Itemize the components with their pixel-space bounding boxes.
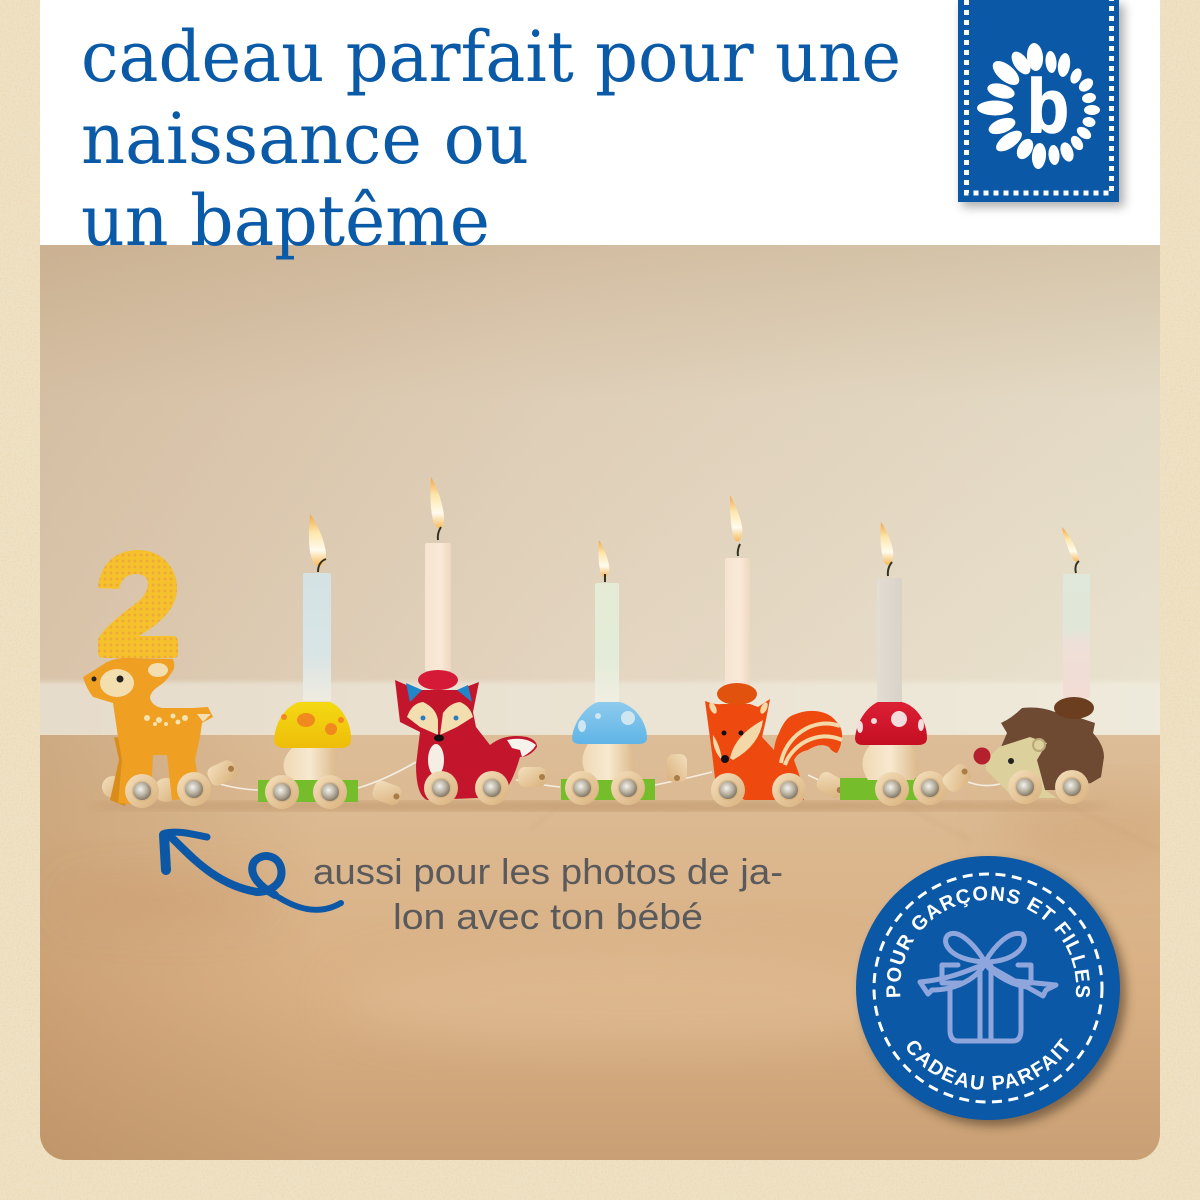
logo tag xyxy=(958,0,1124,207)
deer face xyxy=(100,669,134,697)
wall shading xyxy=(40,245,1160,444)
candle xyxy=(425,543,451,671)
bead xyxy=(205,758,239,788)
wall xyxy=(40,245,1160,695)
yellow cap xyxy=(274,702,351,748)
caption: aussi pour les photos de ja- xyxy=(313,851,783,892)
flower logo xyxy=(977,42,1100,170)
stem xyxy=(582,744,635,780)
wheels xyxy=(1008,770,1042,804)
stitched ring xyxy=(874,874,1102,1102)
deer ear xyxy=(148,663,168,677)
cap spots xyxy=(578,711,635,732)
deer eye and nose xyxy=(92,676,124,682)
title: cadeau parfait pour une xyxy=(81,16,901,98)
floor plank lines xyxy=(530,806,1160,850)
floor tones xyxy=(395,796,1160,1038)
floor side shading xyxy=(40,735,214,1160)
deer wheels xyxy=(125,774,159,808)
toy train xyxy=(83,477,1104,809)
hedgehog spines xyxy=(1001,708,1104,790)
deer tail mark xyxy=(197,714,211,722)
wooden floor xyxy=(40,735,1160,1160)
deer with number two xyxy=(83,550,213,808)
blue cap xyxy=(572,702,647,744)
white header panel xyxy=(40,0,1160,246)
wick xyxy=(1075,561,1079,573)
flame xyxy=(598,540,609,577)
badge shadow xyxy=(862,862,1126,1126)
wheels xyxy=(711,773,745,807)
fox body xyxy=(395,680,537,800)
hedgehog wagon xyxy=(974,527,1104,804)
bead xyxy=(370,779,404,807)
hedgehog eye xyxy=(1008,758,1014,764)
flame xyxy=(880,522,893,565)
cords xyxy=(212,762,1010,790)
title xyxy=(81,16,901,262)
candle xyxy=(877,578,902,704)
hedgehog ear xyxy=(1033,739,1045,751)
squirrel eyes and nose xyxy=(721,730,744,763)
caption: lon avec ton bébé xyxy=(393,896,703,937)
flame xyxy=(730,495,742,541)
blue mushroom wagon xyxy=(561,540,655,805)
badge xyxy=(856,856,1132,1132)
red mushroom wagon xyxy=(840,522,947,806)
candle xyxy=(725,558,750,686)
tail stripes xyxy=(781,724,842,765)
candle xyxy=(303,573,331,701)
number 2 xyxy=(98,550,178,658)
flame xyxy=(309,514,326,566)
fox belly xyxy=(428,744,444,776)
deer spots xyxy=(144,714,188,726)
tail tip xyxy=(507,739,536,757)
wheels xyxy=(565,771,599,805)
toy shadows xyxy=(90,801,1110,811)
cheek xyxy=(713,735,722,760)
deer side edge xyxy=(110,737,135,806)
badge top text: POUR GARÇONS ET FILLES xyxy=(886,886,1090,998)
wick xyxy=(604,574,606,582)
green base xyxy=(840,778,922,800)
squirrel body and tail xyxy=(705,699,842,800)
cap spots xyxy=(281,713,344,735)
logo letter: b xyxy=(1027,64,1069,149)
wick xyxy=(438,527,441,540)
deer back wheels xyxy=(102,776,124,798)
photo panel xyxy=(30,245,1200,1160)
wheels xyxy=(265,775,299,809)
cap spots xyxy=(857,711,924,733)
stem xyxy=(862,745,918,780)
fox eyes and nose xyxy=(420,716,458,742)
candle xyxy=(1063,574,1090,698)
deer back wheel rear xyxy=(154,778,178,802)
red fox wagon xyxy=(395,477,537,805)
bead xyxy=(940,761,974,795)
title: naissance ou xyxy=(81,98,529,180)
wick xyxy=(738,544,740,556)
orange squirrel wagon xyxy=(705,495,842,807)
wheels xyxy=(424,771,458,805)
fox ears xyxy=(406,683,472,702)
flame xyxy=(1062,527,1079,562)
tag shadow xyxy=(962,4,1124,207)
baseboard xyxy=(30,682,1170,736)
red cap xyxy=(855,702,927,745)
bead holder xyxy=(1054,697,1094,719)
tag body xyxy=(958,0,1119,202)
bead holder xyxy=(418,670,458,690)
wick xyxy=(318,559,326,572)
hedgehog face xyxy=(986,737,1057,798)
yellow mushroom wagon xyxy=(258,514,358,809)
stem xyxy=(283,748,337,780)
bead xyxy=(667,754,687,782)
green base xyxy=(258,780,358,802)
muzzle xyxy=(730,720,763,760)
badge disc xyxy=(856,856,1120,1120)
wick xyxy=(888,562,892,576)
caption xyxy=(313,851,783,937)
deer body xyxy=(83,658,213,805)
gift icon xyxy=(920,933,1056,1041)
arrow xyxy=(164,832,341,910)
title: un baptême xyxy=(81,180,490,262)
hedgehog nose xyxy=(974,748,990,764)
ear marks xyxy=(708,701,769,715)
wheels xyxy=(875,772,909,806)
badge bottom text: CADEAU PARFAIT xyxy=(907,1038,1069,1090)
bead xyxy=(518,767,546,787)
bead holder xyxy=(717,683,757,705)
green base xyxy=(561,779,655,800)
bead xyxy=(814,769,848,801)
fox face xyxy=(407,702,473,735)
stitching xyxy=(966,0,1112,193)
flame xyxy=(430,477,444,529)
candle xyxy=(595,583,619,703)
